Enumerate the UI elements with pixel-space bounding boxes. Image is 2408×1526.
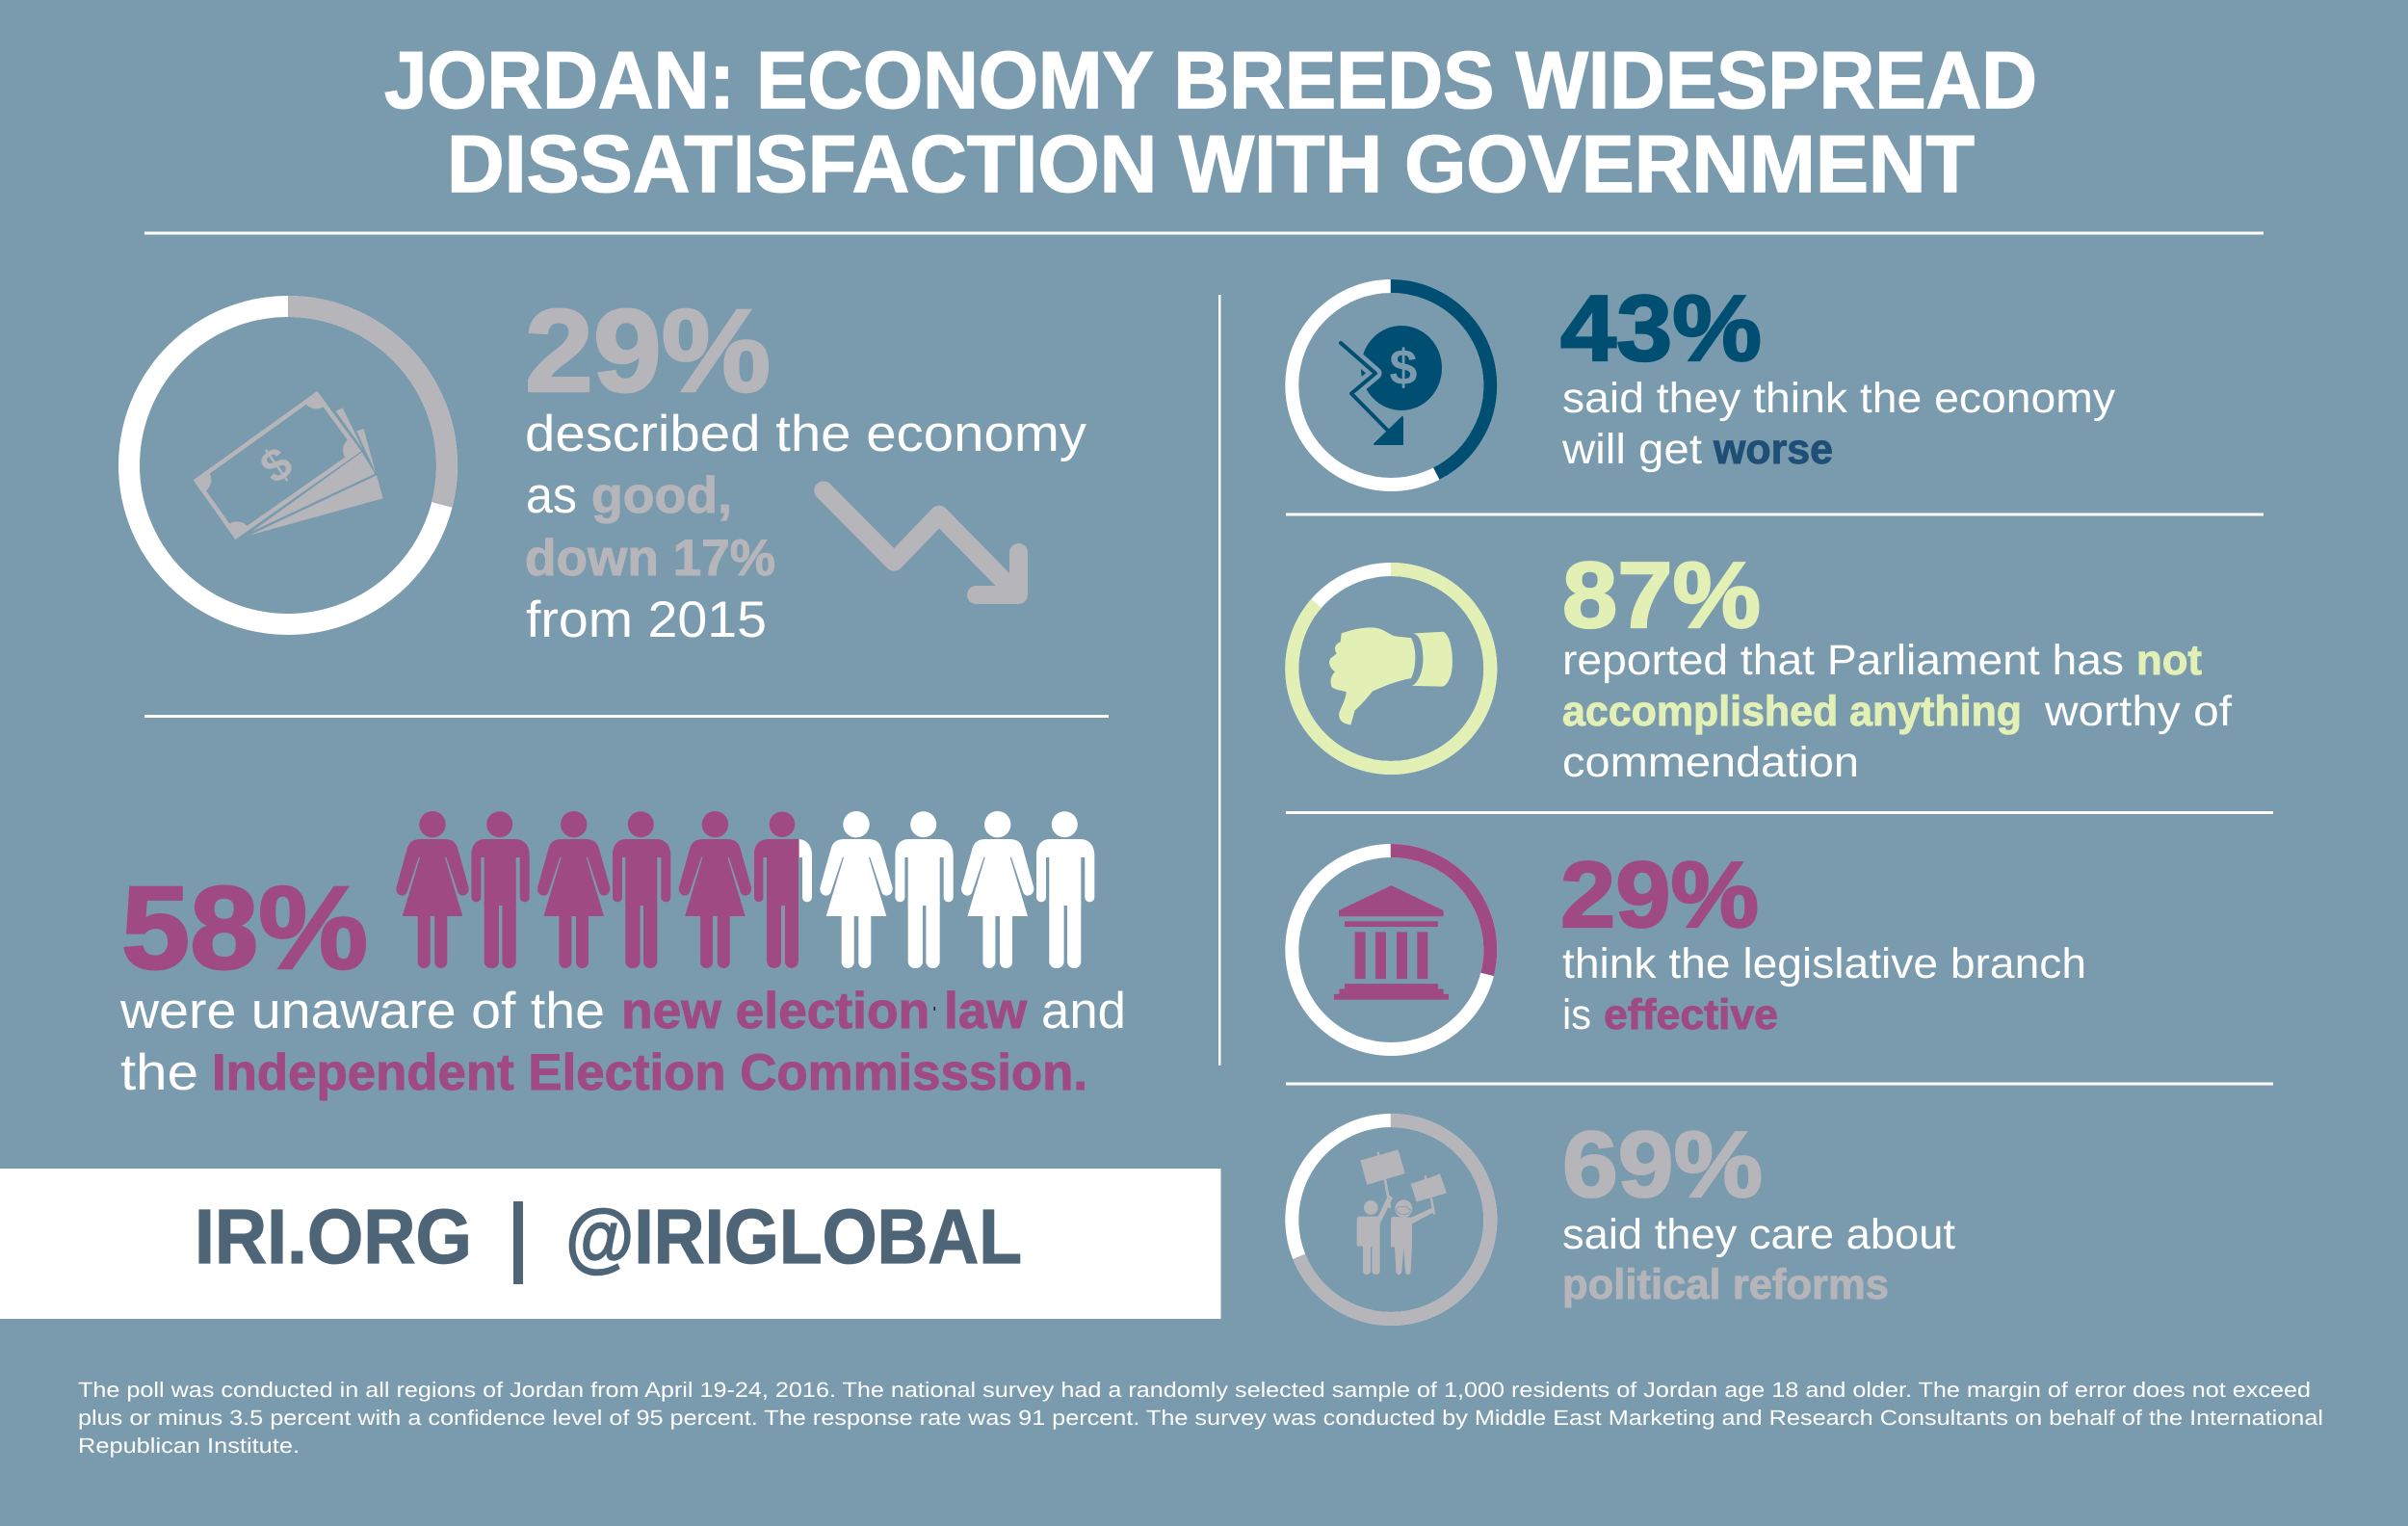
footnote: survey methodology: The poll was conducted in all regions of Jordan from April 19-24, 2016. The national survey had a randomly selected sample of 1,000 residents of Jordan age 18 and older. The margin of error does not exceed: [78, 1378, 2311, 1402]
icon: banknotes: [193, 391, 383, 539]
icon: downward trend arrow: [824, 490, 1019, 595]
text: economy described as good: described the economy: [525, 406, 1087, 462]
text: parliament has not accomplished anything: commendation: [1562, 739, 1859, 786]
text: unaware of election law: the: [120, 1044, 198, 1101]
title: DISSATISFACTION WITH GOVERNMENT: [447, 118, 1975, 209]
text: parliament has not accomplished anything: accomplished anything: [1562, 688, 2022, 735]
panel: economy described as good: [129, 285, 1087, 648]
stat: 58 percent: 58%: [121, 862, 368, 993]
icon: falling dollar: $: [1390, 340, 1418, 396]
text: care about political reforms: political reforms: [1562, 1261, 1889, 1308]
stat: 69 percent: 69%: [1562, 1112, 1763, 1217]
text: unaware of election law: Independent Election Commisssion.: [212, 1044, 1087, 1101]
text: legislative branch effective: think the legislative branch: [1562, 940, 2086, 987]
icon: government building: [1334, 885, 1449, 1000]
panel: legislative branch: [1292, 842, 2086, 1049]
title: [384, 35, 2037, 209]
text: care about political reforms: [1562, 1211, 1955, 1308]
ring chart: 87 percent: [1292, 569, 1490, 768]
text: economy described as good: [525, 406, 1087, 648]
text: parliament has not accomplished anything: [1562, 637, 2233, 786]
text: economy described as good: down 17%: [525, 530, 775, 587]
stat: 87 percent: 87%: [1562, 542, 1761, 647]
ring chart: 69 percent: [1292, 1120, 1490, 1319]
text: economy described as good: good,: [591, 467, 732, 524]
stat: 43 percent: 43%: [1560, 276, 1762, 381]
text: legislative branch effective: effective: [1604, 991, 1778, 1039]
ring chart: 43 percent: [1292, 286, 1490, 485]
text: economy will get worse: worse: [1713, 426, 1833, 473]
band: website and handle: IRI.ORG: [195, 1194, 472, 1279]
panel: election awareness: [119, 811, 1126, 1101]
ring chart: 29 percent: [1292, 851, 1490, 1049]
footnote: survey methodology: Republican Institute.: [78, 1434, 300, 1458]
title: JORDAN: ECONOMY BREEDS WIDESPREAD: [384, 35, 2037, 125]
vertical divider: [1218, 295, 1221, 1066]
ring chart: 29 percent: [129, 306, 447, 624]
text: economy described as good: from 2015: [526, 592, 767, 648]
text: parliament has not accomplished anything: not: [2136, 637, 2202, 684]
text: economy will get worse: [1561, 375, 2115, 473]
text: unaware of election law: [119, 983, 1126, 1101]
text: care about political reforms: said they care about: [1562, 1211, 1955, 1258]
text: legislative branch effective: [1562, 940, 2086, 1039]
text: parliament has not accomplished anything: worthy of: [2044, 688, 2233, 735]
icon: thumbs down: [1329, 627, 1453, 725]
footnote: survey methodology: plus or minus 3.5 percent with a confidence level of 95 percent. The response rate was 91 percent. The survey was conducted by Middle East Marketing and Research Consultants on behalf of the International: [78, 1406, 2323, 1430]
band: website and handle: @IRIGLOBAL: [565, 1194, 1022, 1279]
stat: 29 percent: 29%: [1560, 842, 1759, 947]
text: economy will get worse: will get: [1561, 426, 1702, 473]
text: economy described as good: as: [526, 467, 577, 524]
text: unaware of election law: and: [1041, 983, 1126, 1039]
stat: 29 percent: 29%: [525, 285, 771, 416]
panel: parliament accomplishment: [1292, 542, 2233, 786]
text: unaware of election law: were unaware of the: [119, 983, 605, 1039]
icon: protesters with signs: [1357, 1149, 1447, 1275]
panel: economy will get worse: [1292, 276, 2115, 485]
icon: banknotes: $: [251, 437, 302, 494]
icon: falling dollar: [1341, 326, 1442, 444]
text: legislative branch effective: is: [1562, 991, 1591, 1039]
band: website and handle: [0, 1169, 1221, 1319]
pictogram: ten people, 58 percent coloured: [396, 811, 1094, 968]
panel: political reforms: [1292, 1112, 1955, 1319]
text: unaware of election law: new election law: [621, 983, 1028, 1039]
text: economy will get worse: said they think the economy: [1562, 375, 2115, 422]
footnote: survey methodology: [78, 1378, 2323, 1458]
text: parliament has not accomplished anything: reported that Parliament has: [1562, 637, 2124, 684]
